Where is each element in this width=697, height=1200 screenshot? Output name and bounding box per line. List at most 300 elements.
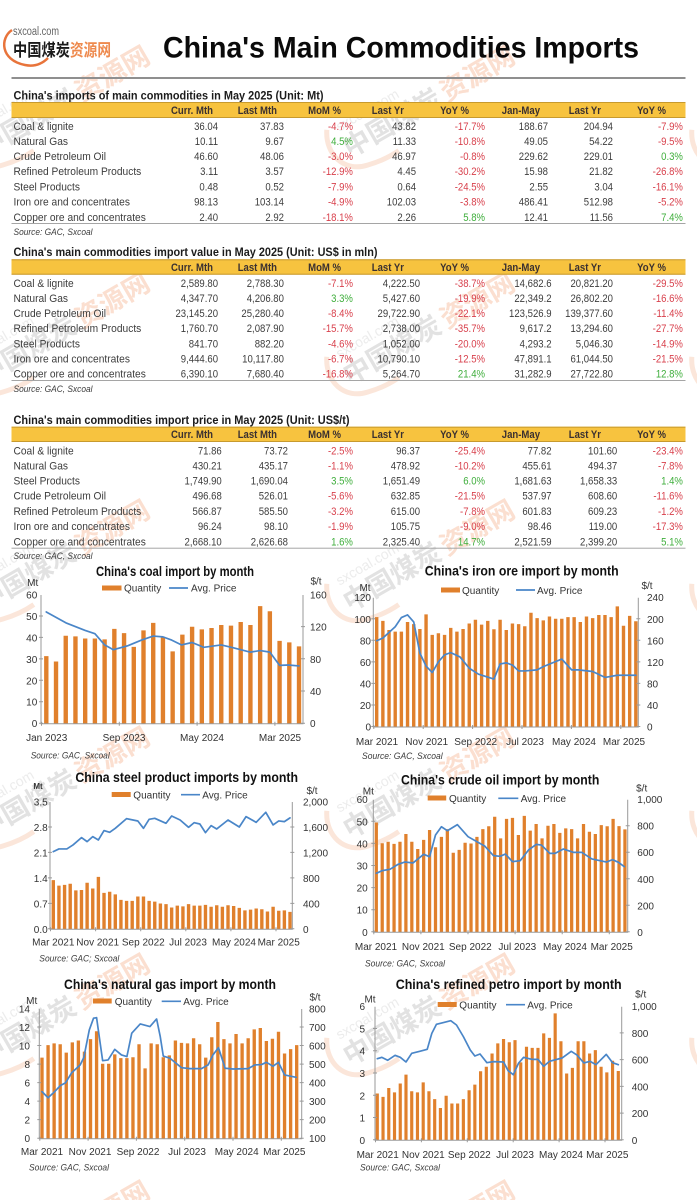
quantity bars: [53, 877, 290, 929]
legend: Quantity: [459, 1000, 497, 1012]
table values: 77.82: [528, 446, 552, 458]
table values: 5.8%: [463, 212, 485, 224]
axis labels: Sep 2023: [103, 733, 146, 744]
quantity bars: [376, 816, 625, 932]
axis labels: Mar 2021: [32, 938, 75, 949]
axis labels: 800: [632, 1029, 649, 1040]
table heading: China's main commodities import price in May 2025 (Unit: US$/t): [14, 415, 350, 427]
watermarks: sxcoal.com: [333, 993, 402, 1042]
watermarks: 中国煤炭: [338, 310, 447, 390]
table header band: [12, 102, 686, 118]
axis labels: [19, 993, 326, 1158]
axis labels: 10: [357, 906, 368, 917]
axis labels: Mt: [27, 578, 38, 589]
axis labels: 200: [632, 1109, 649, 1120]
axis labels: Nov 2021: [405, 737, 449, 748]
chart: coal import: [26, 563, 327, 761]
table values: -1.1%: [328, 461, 353, 473]
table values: 0.52: [265, 182, 284, 194]
main title: China's Main Commodities Imports: [163, 32, 639, 64]
axis labels: 20: [357, 884, 368, 895]
watermarks: 资源网: [435, 268, 520, 334]
table values: 5,264.70: [383, 369, 420, 381]
table header band: Curr. Mth: [171, 105, 213, 117]
table values: 2.55: [529, 182, 548, 194]
axis labels: Mar 2021: [356, 737, 399, 748]
watermarks: 中国煤炭: [338, 83, 447, 163]
table source: Source: GAC, Sxcoal: [14, 384, 93, 395]
axis labels: 40: [310, 687, 322, 698]
table values: 4,206.80: [247, 293, 284, 305]
table values: 601.83: [522, 506, 552, 518]
axis labels: Sep 2022: [117, 1147, 160, 1158]
axis labels: 80: [647, 679, 659, 690]
table values: -38.7%: [455, 278, 485, 290]
table values: 526.01: [259, 491, 288, 503]
table values: 9.67: [265, 136, 284, 148]
table values: 1,690.04: [251, 476, 288, 488]
axis labels: 40: [360, 679, 371, 690]
axis labels: Mt: [364, 994, 376, 1005]
table values: 6,390.10: [181, 369, 218, 381]
axis labels: 600: [632, 1056, 649, 1067]
axis labels: $/t: [310, 577, 322, 588]
table header band: Last Yr: [569, 105, 601, 117]
axis labels: 800: [309, 1004, 326, 1016]
table values: -17.7%: [455, 121, 485, 133]
table heading: China's main commodities import value in May 2025 (Unit: US$ in mln): [14, 247, 378, 259]
chart title: China's natural gas import by month: [64, 976, 276, 992]
table header band: YoY %: [440, 262, 469, 274]
table values: 1,651.49: [383, 476, 420, 488]
row labels: Steel Products: [13, 181, 80, 194]
table values: 1,760.70: [181, 323, 218, 335]
table values: -1.9%: [328, 521, 353, 533]
axis labels: 1: [359, 1114, 365, 1124]
table values: -26.8%: [653, 166, 683, 178]
axis labels: Mar 2025: [263, 1147, 306, 1158]
table values: 2,738.00: [383, 323, 420, 335]
table values: 119.00: [589, 521, 618, 533]
table values: 486.41: [519, 197, 548, 209]
legend: Avg. Price: [537, 586, 583, 597]
table values: -5.2%: [658, 197, 683, 209]
axis labels: Mar 2021: [357, 1150, 399, 1161]
axis labels: May 2024: [212, 938, 256, 949]
axis labels: 200: [309, 1116, 326, 1127]
axis labels: 0: [362, 928, 368, 939]
axis labels: May 2024: [180, 733, 224, 744]
table values: -7.8%: [658, 461, 683, 473]
table values: 5,427.60: [383, 293, 420, 305]
table values: 103.14: [255, 197, 284, 209]
legend: [441, 586, 583, 597]
table header band: Jan-May: [502, 262, 540, 274]
axis labels: 12: [19, 1023, 30, 1034]
table values: 455.61: [522, 461, 552, 473]
table values: -3.0%: [328, 151, 353, 163]
table values: -18.1%: [323, 212, 353, 224]
table values: 632.85: [391, 491, 420, 503]
table values: 229.62: [519, 151, 548, 163]
axis labels: 120: [354, 593, 371, 604]
axis labels: 500: [309, 1060, 326, 1071]
axis labels: Nov 2021: [76, 938, 120, 949]
axis labels: $/t: [641, 581, 653, 592]
table values: -20.0%: [455, 339, 485, 351]
table header band: Last Yr: [569, 429, 601, 441]
table values: 1.6%: [331, 537, 353, 549]
table header band: Last Yr: [372, 429, 404, 441]
table values: 48.06: [260, 151, 284, 163]
legend: Quantity: [462, 586, 499, 597]
table values: 22,349.2: [514, 293, 552, 305]
table values: 10.11: [195, 136, 218, 148]
axis labels: 20: [360, 701, 371, 712]
axis labels: [355, 784, 663, 953]
axis labels: 40: [357, 839, 368, 850]
axis labels: 8: [24, 1060, 30, 1071]
axis labels: 400: [637, 875, 654, 886]
chart: steel imports: [32, 769, 328, 965]
watermarks: 资源网: [70, 722, 155, 788]
table values: 73.72: [264, 446, 288, 458]
axis labels: 0: [303, 925, 309, 936]
axis labels: Jul 2023: [496, 1150, 534, 1161]
table values: 608.60: [588, 491, 618, 503]
table values: 11.56: [590, 212, 613, 224]
axis labels: Sep 2022: [122, 938, 165, 949]
legend: Quantity: [115, 997, 152, 1008]
table values: 46.97: [392, 151, 416, 163]
table values: 71.86: [198, 446, 222, 458]
axis labels: 50: [357, 817, 368, 828]
chart source: Source: GAC; Sxcoal: [39, 954, 120, 965]
table values: 3.3%: [331, 293, 353, 305]
axis labels: 120: [647, 658, 664, 669]
axis labels: Mar 2025: [603, 737, 646, 748]
axes: [41, 595, 303, 724]
table values: 105.75: [391, 521, 420, 533]
legend: Avg. Price: [183, 997, 229, 1008]
axis labels: Mt: [363, 787, 374, 798]
table values: 512.98: [584, 197, 613, 209]
axis labels: 1,600: [303, 823, 328, 834]
legend: [438, 1000, 573, 1012]
table values: -4.6%: [328, 339, 353, 351]
table values: -5.6%: [328, 491, 353, 503]
table header band: Last Yr: [569, 262, 601, 274]
axis labels: 30: [357, 862, 368, 872]
watermarks: 中国煤炭: [338, 537, 447, 617]
axis labels: 2.8: [34, 823, 48, 834]
watermarks: 资源网: [435, 722, 520, 788]
price line: [53, 812, 290, 852]
chart title: China's iron ore import by month: [425, 563, 619, 579]
table values: -12.5%: [455, 354, 485, 366]
table values: -7.9%: [658, 121, 683, 133]
table values: 3.57: [265, 166, 284, 178]
table values: -24.5%: [455, 182, 485, 194]
table values: 3.04: [594, 182, 613, 194]
axes: [375, 1007, 622, 1140]
table values: 229.01: [584, 151, 613, 163]
table values: 2,325.40: [383, 537, 420, 549]
table values: -4.9%: [328, 197, 353, 209]
axis labels: 800: [303, 874, 320, 885]
axis labels: 100: [354, 615, 371, 626]
table values: 29,722.90: [378, 308, 420, 320]
axis labels: 120: [310, 623, 327, 634]
table values: -2.5%: [328, 446, 353, 458]
price line: [377, 1021, 618, 1075]
axis labels: 6: [359, 1002, 365, 1013]
axis labels: 0: [310, 719, 316, 730]
row labels: Steel Products: [13, 338, 80, 351]
table values: 4.45: [397, 166, 416, 178]
table: import price: [12, 415, 686, 562]
table header band: Jan-May: [502, 105, 540, 117]
table values: -9.0%: [460, 521, 485, 533]
row labels: [13, 121, 146, 224]
row labels: Natural Gas: [13, 136, 68, 148]
table values: 12.41: [524, 212, 548, 224]
table values: 98.10: [264, 521, 288, 533]
table source: Source: GAC, Sxcoal: [14, 551, 93, 562]
axis labels: 0: [365, 722, 371, 734]
table header band: MoM %: [308, 262, 341, 274]
table values: 14,682.6: [514, 278, 552, 290]
axis labels: 0: [32, 719, 38, 730]
axis labels: 400: [309, 1079, 326, 1090]
table values: 61,044.50: [570, 354, 613, 366]
axis labels: [26, 577, 327, 744]
table values: 101.60: [588, 446, 618, 458]
chart source: Source: GAC, Sxcoal: [29, 1163, 110, 1174]
table values: 10,790.10: [378, 354, 420, 366]
table values: 496.68: [193, 491, 222, 503]
chart: natural gas import: [19, 976, 326, 1174]
table values: -22.1%: [455, 308, 485, 320]
chart: crude oil import: [355, 771, 663, 969]
axis labels: Sep 2022: [448, 1150, 491, 1161]
row labels: Crude Petroleum Oil: [13, 490, 106, 503]
chart title: China's coal import by month: [96, 563, 254, 579]
axis labels: 600: [309, 1042, 326, 1053]
table values: -14.9%: [653, 339, 683, 351]
table values: 6.0%: [463, 476, 485, 488]
table values: 2,399.20: [580, 537, 618, 549]
table values: 4,222.50: [383, 278, 420, 290]
logo: sxcoal: 中国煤炭: [13, 41, 70, 60]
table values: 47,891.1: [514, 354, 552, 366]
row labels: Natural Gas: [13, 293, 68, 305]
chart source: Source: GAC, Sxcoal: [360, 1163, 441, 1174]
chart: refined petro import: [357, 976, 657, 1174]
row labels: Steel Products: [13, 475, 80, 488]
axis labels: 200: [647, 615, 664, 626]
watermarks: sxcoal.com: [333, 312, 402, 361]
legend: Avg. Price: [202, 790, 248, 802]
table values: -8.4%: [328, 308, 353, 320]
table values: 0.48: [199, 182, 218, 194]
table values: 2,087.90: [247, 323, 284, 335]
logo: sxcoal: sxcoal.com: [13, 26, 59, 38]
table values: -23.4%: [653, 446, 683, 458]
axis labels: 0: [24, 1134, 30, 1145]
table values: 4.5%: [331, 136, 353, 148]
watermarks: sxcoal.com: [333, 85, 402, 134]
table header band: Last Yr: [372, 262, 404, 274]
watermarks: 资源网: [70, 268, 155, 334]
watermarks: 资源网: [435, 495, 520, 561]
legend: Avg. Price: [527, 1000, 573, 1012]
table values: -7.8%: [460, 506, 485, 518]
axis labels: 160: [310, 590, 327, 602]
row labels: Iron ore and concentrates: [13, 521, 130, 533]
price line: [46, 612, 299, 666]
axis labels: 0.0: [34, 925, 48, 936]
axis labels: 6: [24, 1079, 30, 1090]
axis labels: Mar 2025: [591, 942, 633, 953]
axes: [39, 1009, 302, 1139]
table values: 14.7%: [458, 537, 485, 549]
axis labels: 5: [359, 1024, 365, 1036]
quantity bars: [377, 1013, 618, 1140]
logo: sxcoal: 资源网: [70, 41, 111, 60]
table values: 2.92: [265, 212, 284, 224]
axis labels: 200: [637, 901, 654, 912]
table values: 4,347.70: [181, 293, 218, 305]
table header band: Curr. Mth: [171, 262, 213, 274]
axis labels: Mt: [359, 583, 371, 594]
table values: -11.4%: [653, 308, 683, 320]
table values: 1,052.00: [383, 339, 420, 351]
axis labels: 60: [357, 795, 368, 806]
table values: 37.83: [260, 121, 284, 133]
axis labels: 2.1: [34, 848, 48, 859]
axis labels: 50: [26, 612, 38, 623]
table values: -0.8%: [460, 151, 485, 163]
watermarks: 中国煤炭: [338, 991, 447, 1071]
table header band: [12, 259, 686, 275]
table values: -16.8%: [323, 369, 353, 381]
table values: 2,521.59: [514, 537, 552, 549]
table header band: YoY %: [637, 262, 666, 274]
table values: 841.70: [189, 339, 218, 351]
legend: [102, 584, 237, 594]
table values: 430.21: [193, 461, 222, 473]
table header band: Last Mth: [238, 105, 277, 117]
table values: 5.1%: [661, 537, 683, 549]
table values: [175, 278, 683, 381]
axis labels: Mar 2025: [259, 733, 302, 744]
price line: [377, 615, 636, 679]
table values: 7,680.40: [247, 369, 284, 381]
legend: Avg. Price: [521, 794, 567, 805]
title divider: [12, 77, 686, 79]
table values: -10.2%: [455, 461, 485, 473]
axis labels: 1,000: [632, 1002, 657, 1013]
table values: 0.3%: [661, 151, 683, 163]
table values: 49.05: [524, 136, 548, 148]
table values: 585.50: [259, 506, 288, 518]
table values: 1.4%: [661, 476, 683, 488]
chart title: China's crude oil import by month: [401, 771, 599, 787]
axis labels: 40: [26, 633, 38, 644]
chart title: China's refined petro import by month: [396, 976, 622, 992]
legend: [93, 997, 229, 1008]
price line: [376, 825, 624, 873]
table values: [185, 446, 683, 549]
axis labels: [32, 782, 328, 949]
axis labels: 0: [632, 1136, 638, 1147]
table values: -29.5%: [653, 278, 683, 290]
table values: -16.1%: [653, 182, 683, 194]
axis labels: $/t: [636, 784, 647, 795]
table values: 5,046.30: [576, 339, 613, 351]
axis labels: 40: [647, 701, 659, 712]
watermarks: 资源网: [435, 949, 520, 1015]
price line: [42, 1018, 296, 1098]
axis labels: Nov 2021: [69, 1147, 112, 1158]
table header band: YoY %: [440, 105, 469, 117]
table values: -10.8%: [455, 136, 485, 148]
table values: 9,444.60: [181, 354, 218, 366]
table header band: Last Yr: [372, 105, 404, 117]
table values: 15.98: [524, 166, 548, 178]
table values: -4.7%: [328, 121, 353, 133]
table values: -6.7%: [328, 354, 353, 366]
table values: 27,722.80: [570, 369, 613, 381]
table values: 21.82: [589, 166, 613, 178]
table values: 2,788.30: [247, 278, 284, 290]
axis labels: 30: [26, 655, 38, 666]
table values: 11.33: [393, 136, 416, 148]
axis labels: May 2024: [539, 1150, 583, 1161]
table values: 123,526.9: [509, 308, 552, 320]
row labels: Copper ore and concentrates: [13, 536, 146, 548]
row labels: Crude Petroleum Oil: [13, 151, 106, 163]
row labels: Refined Petroleum Products: [13, 506, 141, 518]
table values: 98.46: [528, 521, 552, 533]
axes: [373, 800, 628, 932]
table values: 20,821.20: [570, 278, 613, 290]
table source: Source: GAC, Sxcoal: [14, 227, 93, 238]
table header band: MoM %: [308, 105, 341, 117]
axis labels: 2,000: [303, 798, 328, 808]
table values: 2.26: [397, 212, 416, 224]
table values: -7.9%: [328, 182, 353, 194]
axis labels: 400: [632, 1082, 649, 1093]
table header band: [12, 427, 686, 442]
row labels: Refined Petroleum Products: [13, 323, 141, 335]
row labels: [13, 445, 146, 548]
axis labels: May 2024: [552, 737, 596, 748]
axis labels: 1,000: [637, 795, 663, 806]
table values: 23,145.20: [175, 308, 218, 320]
table values: -11.6%: [653, 491, 683, 503]
axis labels: Jul 2023: [169, 938, 207, 949]
table values: 7.4%: [661, 212, 683, 224]
axis labels: 300: [309, 1097, 326, 1108]
table values: 36.04: [194, 121, 218, 133]
table values: 2,626.68: [251, 537, 288, 549]
axis labels: 700: [309, 1023, 326, 1034]
legend: Quantity: [133, 790, 171, 802]
axis labels: 800: [637, 822, 654, 833]
table values: 1,658.33: [580, 476, 618, 488]
